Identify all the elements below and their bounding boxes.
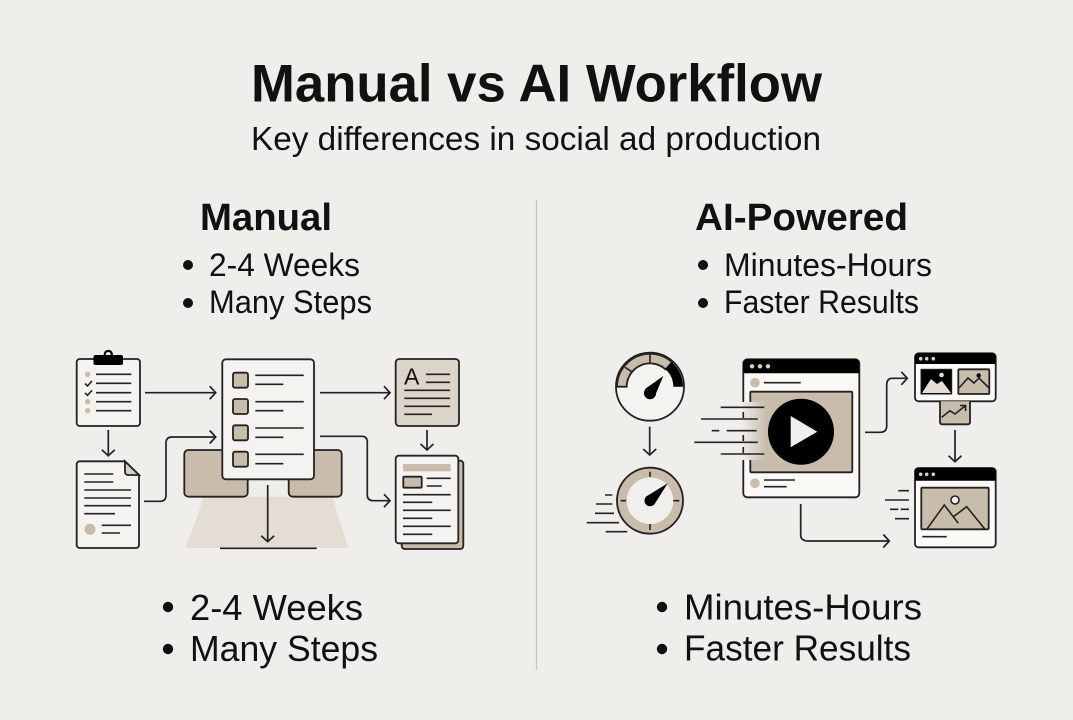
icon: lower speed gauge (587, 468, 683, 534)
heading: manual: Manual (200, 197, 332, 239)
icon: growth chart card (940, 401, 970, 424)
title: Manual vs AI Workflow (251, 54, 823, 114)
arrow: clipboard to panel (145, 392, 216, 394)
arrow: text document to pages (426, 430, 428, 450)
arrow: panel to stacked pages (320, 436, 390, 501)
arrow: gallery to landscape window (954, 430, 956, 462)
icon: text document (396, 359, 459, 426)
icon: central checklist panel (222, 359, 314, 479)
manual workflow diagram (77, 351, 463, 549)
icon: video player window (694, 359, 859, 497)
arrow: document to panel (144, 437, 216, 501)
ai summary bullets (698, 247, 932, 320)
manual summary bullets (183, 247, 372, 320)
icon: document (77, 461, 139, 548)
manual bottom bullets: Many Steps (190, 628, 378, 669)
ai workflow diagram (587, 353, 996, 547)
manual summary bullets: Many Steps (209, 284, 372, 320)
arrow: panel downward (267, 485, 269, 542)
icon: landscape image window (885, 468, 996, 547)
manual bottom bullets: 2-4 Weeks (190, 587, 363, 628)
ai summary bullets: Minutes-Hours (724, 247, 932, 283)
arrow: gauge to gauge (649, 427, 651, 455)
heading: ai-powered: AI-Powered (695, 197, 908, 239)
manual summary bullets: 2-4 Weeks (209, 247, 360, 283)
icon: stacked layout pages (396, 456, 463, 549)
arrow: panel to text document (320, 392, 390, 394)
ai summary bullets: Faster Results (724, 284, 919, 320)
ai bottom bullets: Faster Results (684, 628, 911, 668)
ai bottom bullets (657, 586, 922, 668)
arrow: clipboard to document (107, 430, 109, 456)
subtitle: Key differences in social ad production (251, 121, 821, 158)
arrow: video to gallery (865, 378, 907, 432)
icon: base shapes under checklist (184, 450, 348, 548)
icon: clipboard checklist (77, 351, 140, 426)
arrow: video to landscape window (801, 504, 889, 541)
icon: image gallery window (915, 353, 996, 401)
icon: text document: A (404, 364, 420, 390)
ai bottom bullets: Minutes-Hours (684, 586, 922, 628)
manual bottom bullets (163, 587, 378, 669)
icon: upper speed gauge (616, 353, 684, 421)
